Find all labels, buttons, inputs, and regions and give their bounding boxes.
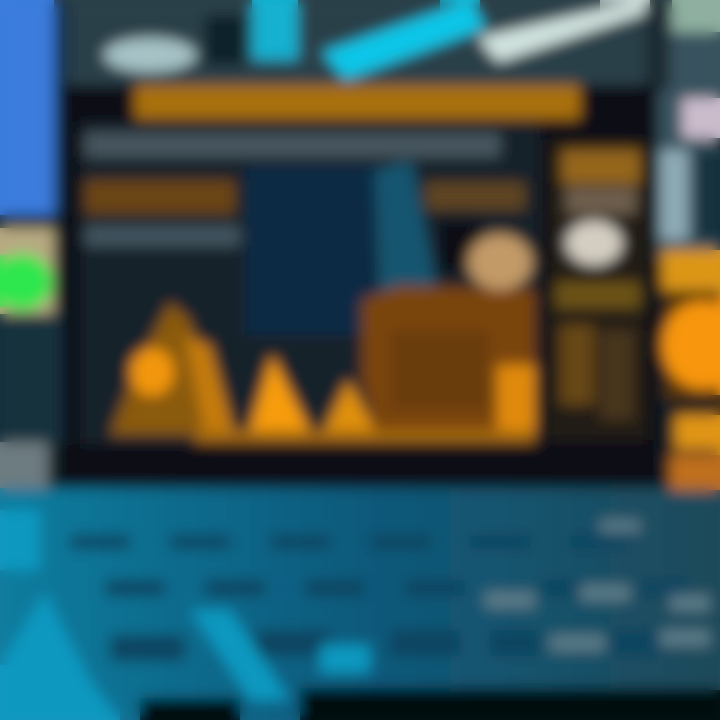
heading — [135, 85, 580, 119]
chart backdrop — [245, 160, 480, 335]
text block: orange right — [425, 182, 525, 210]
keyboard keys — [0, 510, 720, 720]
monitor — [62, 85, 658, 485]
text block: orange left — [85, 180, 235, 214]
keyboard — [0, 488, 720, 720]
right top lights — [660, 98, 720, 240]
panel: screen — [80, 85, 580, 444]
text block: grey subtitle — [85, 133, 500, 157]
left cream card with green icon — [0, 228, 54, 314]
text block: grey left — [85, 226, 240, 246]
area chart — [110, 234, 535, 442]
left lower grey block — [0, 442, 48, 488]
left blue panel — [0, 0, 70, 215]
top lights — [104, 0, 720, 90]
right orange element — [662, 250, 720, 490]
panel: right sidebar — [548, 140, 648, 440]
